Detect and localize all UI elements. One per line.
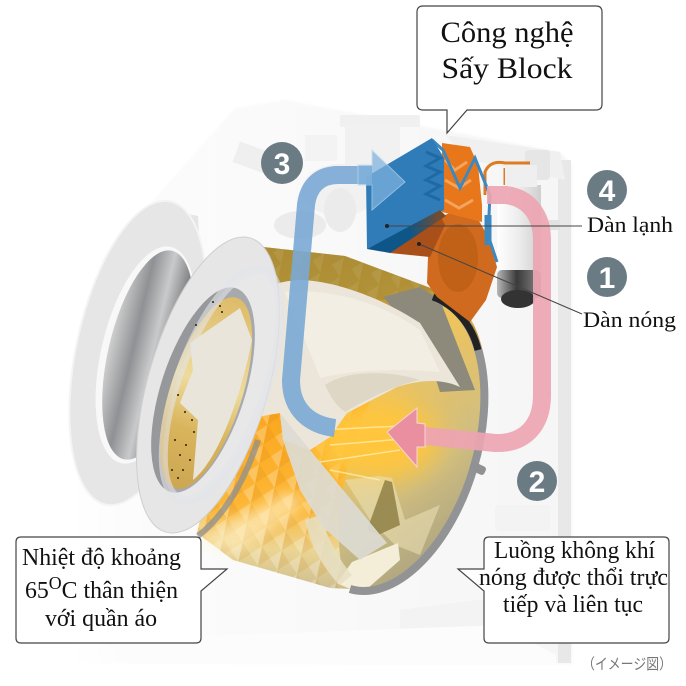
number badge 2: 2	[529, 466, 545, 499]
label: Dàn lạnh with leader line: Dàn lạnh	[587, 212, 673, 237]
arrow: pink hot air flow	[387, 195, 542, 467]
label: Dàn lạnh with leader line	[385, 212, 673, 237]
callout: hot air flow	[458, 537, 669, 643]
white cylinder and dark cap	[497, 165, 541, 308]
number badge 4: 4	[599, 175, 616, 208]
blue refrigerant pipe	[432, 140, 497, 262]
number badge 3	[261, 142, 303, 184]
callout: Công nghệ Sấy Block: Công nghệ	[440, 16, 574, 49]
number badge 2	[517, 461, 557, 501]
callout: Công nghệ Sấy Block	[417, 6, 602, 133]
machine internals: pale mechanical parts and dishes	[233, 115, 565, 239]
translucent door glass	[139, 255, 305, 515]
number badge 1: 1	[599, 262, 615, 295]
callout: temperature	[16, 537, 227, 643]
callout: temperature: O	[49, 573, 62, 593]
callout: temperature: với quần áo	[45, 606, 157, 632]
blue cold coil: Dàn lạnh	[366, 138, 446, 253]
inner door ring with glass	[108, 221, 308, 549]
callout: temperature: C thân thiện	[62, 578, 178, 604]
number badge 4	[587, 170, 627, 210]
arrow: blue air flow	[291, 150, 405, 428]
label: Dàn nóng with leader line	[417, 242, 676, 332]
orange hot coil: Dàn nóng	[390, 143, 530, 322]
callout: hot air flow: nóng được thổi trực	[479, 565, 668, 591]
callout: temperature: 65	[25, 578, 49, 604]
drum	[195, 247, 487, 591]
callout: hot air flow: tiếp và liên tục	[503, 592, 643, 618]
cloth inside door	[180, 308, 252, 480]
callout: hot air flow: Luồng không khí	[494, 538, 655, 564]
number badge 3: 3	[274, 148, 290, 181]
perforation dots	[171, 301, 223, 479]
washing machine body	[62, 100, 572, 664]
cloth	[235, 280, 460, 560]
number badge 1	[587, 257, 627, 297]
caption: （イメージ図）	[582, 656, 672, 673]
outer door	[45, 188, 231, 518]
callout: temperature: Nhiệt độ khoảng	[22, 545, 181, 571]
label: Dàn nóng with leader line: Dàn nóng	[583, 307, 676, 332]
back ring	[350, 299, 484, 591]
drum interior back	[305, 287, 484, 591]
callout: Công nghệ Sấy Block: Sấy Block	[442, 52, 572, 85]
